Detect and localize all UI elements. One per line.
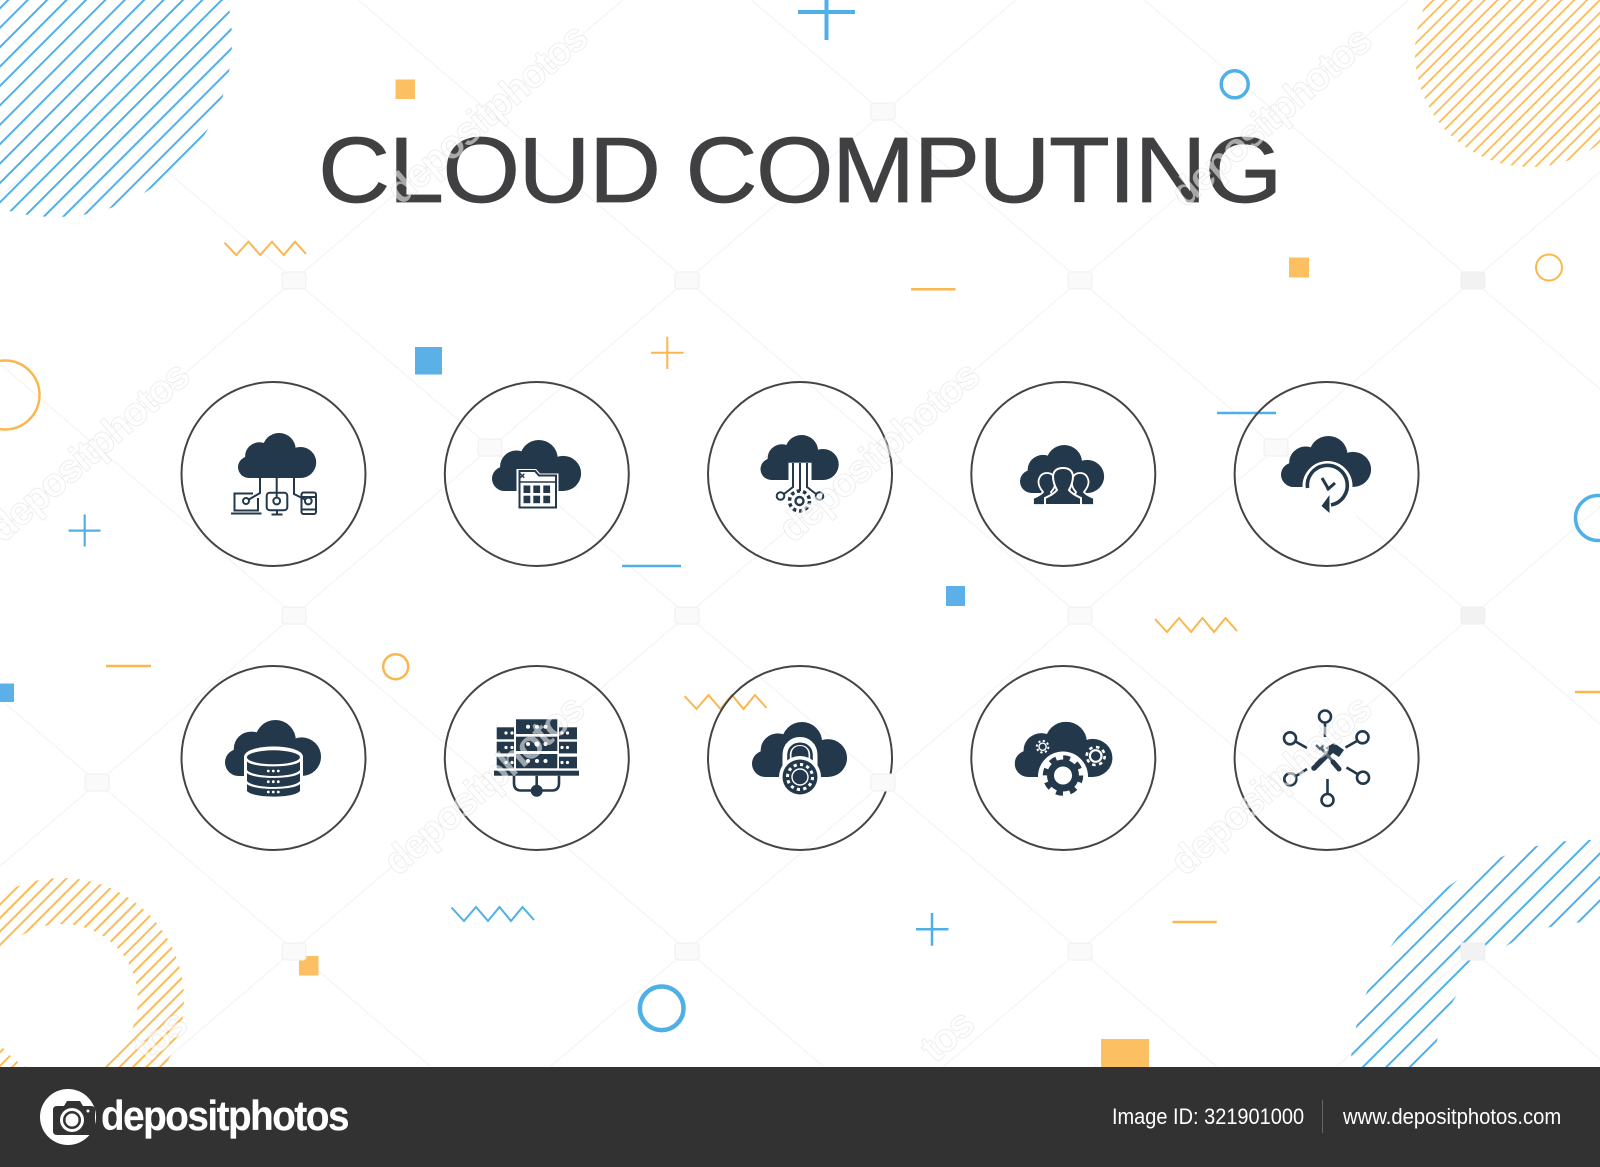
watermark	[0, 15, 1380, 1071]
footer image id: Image ID: 321901000	[1112, 1104, 1304, 1129]
watermark: depositphotos	[378, 15, 596, 213]
striped ring: bottom right blue	[1350, 840, 1600, 1067]
footer bar	[0, 1067, 1600, 1167]
watermark: depositphotos	[1162, 18, 1380, 216]
watermark: depositphotos	[770, 353, 988, 551]
watermark: tos	[125, 1002, 195, 1071]
icon: cloud with gear circuit	[760, 435, 839, 511]
striped disc: top right orange	[1415, 0, 1600, 167]
icon: cloud with gears	[1015, 722, 1112, 802]
watermark: depositphotos	[1162, 686, 1380, 884]
icon: cloud with people group	[1020, 445, 1104, 505]
watermark: tos	[912, 1002, 982, 1071]
circle frame row 2 column 1	[182, 666, 366, 850]
footer logo wordmark: depositphotos	[101, 1091, 348, 1139]
circle frame row 1 column 1	[182, 382, 366, 566]
footer website url: www.depositphotos.com	[1342, 1104, 1561, 1129]
icon: tools hub network	[1284, 710, 1369, 806]
striped disc: top left blue	[0, 0, 232, 217]
circle frame row 2 column 5	[1235, 666, 1419, 850]
icon: cloud padlock with gear	[752, 722, 847, 798]
footer logo mark: camera	[40, 1089, 96, 1145]
striped ring: bottom left orange	[0, 878, 184, 1122]
watermark: depositphotos	[375, 686, 593, 884]
title: CLOUD COMPUTING	[318, 119, 1281, 222]
icon: cloud database	[225, 720, 321, 799]
circle frame row 2 column 4	[971, 666, 1155, 850]
icon: cloud folder grid	[492, 440, 581, 510]
circle frame row 2 column 3	[708, 666, 892, 850]
circle frame row 1 column 5	[1235, 382, 1419, 566]
icon: cloud connected devices	[231, 433, 316, 514]
circle frame row 1 column 3	[708, 382, 892, 566]
icon: cloud with clock backup	[1281, 436, 1371, 518]
icon: server racks network	[494, 719, 579, 797]
circle frame row 1 column 4	[971, 382, 1155, 566]
circle frame row 1 column 2	[445, 382, 629, 566]
circle frame row 2 column 2	[445, 666, 629, 850]
